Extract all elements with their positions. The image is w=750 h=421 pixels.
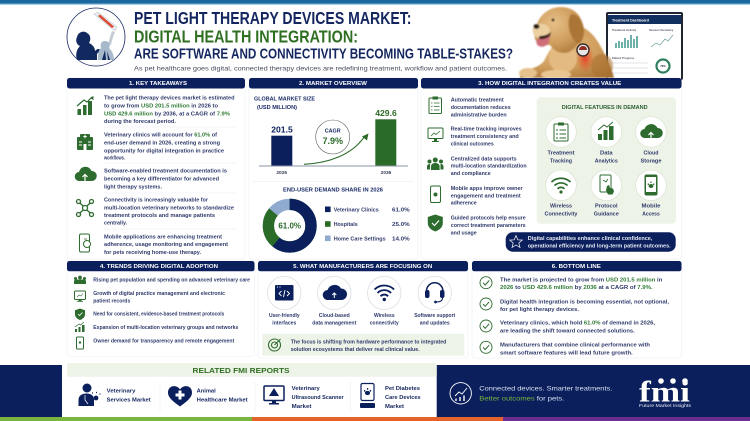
icon: mobile paw — [430, 186, 440, 202]
feature: mobile access: Access — [642, 211, 660, 217]
takeaway text 3: becoming a key differentiator for advanced — [104, 177, 220, 183]
value text 3 — [451, 156, 527, 177]
takeaway text 3: light therapy systems. — [104, 184, 162, 190]
value text 3: Centralized data supports — [451, 156, 517, 162]
heading — [249, 78, 418, 88]
value text 4: adherence — [451, 201, 477, 207]
panel: 6. bottom line — [472, 261, 682, 358]
chart label: (USD MILLION) — [257, 105, 297, 111]
feature: cloud storage: Storage — [640, 158, 662, 164]
takeaway text 5: adherence, usage monitoring and engagement — [104, 242, 228, 248]
footer band — [0, 365, 750, 421]
title: ARE SOFTWARE AND CONNECTIVITY BECOMING TABLE-STAKES? — [134, 45, 513, 62]
legend: 61.0% — [392, 207, 410, 213]
focus: user-friendly interfaces: interfaces — [272, 320, 296, 326]
tablet dashboard: 78% — [660, 64, 666, 68]
callout: focus shift: solution ecosystems that deliver real clinical value. — [291, 347, 420, 353]
icon: mobile app — [80, 234, 90, 252]
bottom line 1: 2026 to USD 429.6 million by 2036 at a CAGR of 7.9%. — [500, 285, 653, 291]
trend 3: Need for consistent, evidence-based treatment protocols — [93, 312, 224, 318]
feature: treatment tracking: Tracking — [550, 158, 573, 164]
tablet dashboard — [606, 12, 683, 80]
value text 4 — [451, 186, 523, 207]
feature: protocol guidance: Guidance — [594, 211, 619, 217]
focus: cloud-based data management — [312, 276, 356, 326]
value text 2: treatment consistency and — [451, 134, 519, 140]
takeaway text 5: for pets receiving home-use therapy. — [104, 250, 201, 256]
icon: network — [76, 200, 94, 216]
takeaway text 4: Connectivity is increasingly valuable for — [104, 198, 209, 204]
takeaway text 4: multi-location veterinary networks to standardize — [104, 205, 234, 211]
icon: veterinary clinic — [77, 134, 93, 150]
focus: wireless connectivity: Wireless — [374, 313, 395, 319]
report: veterinary ultrasound scanner: Market — [292, 404, 312, 410]
bar chart: 201.5 — [271, 124, 293, 134]
legend: 25.0% — [392, 222, 410, 228]
feature: data analytics: Data — [600, 151, 613, 157]
callout: CAGR: CAGR — [325, 128, 341, 134]
chart label — [254, 97, 315, 111]
tablet dashboard: Treatment Dashboard — [612, 18, 649, 22]
value text 1: Automatic treatment — [451, 98, 504, 104]
value text 5 — [451, 216, 526, 236]
takeaway text 2: Veterinary clinics will account for 61.0% of — [104, 132, 217, 138]
tagline: Connected devices. Smarter treatments. — [479, 387, 613, 393]
focus: software support: Software support — [414, 313, 455, 319]
takeaway text 1: The pet light therapy devices market is estimated — [104, 96, 235, 102]
focus: user-friendly interfaces: User-friendly — [269, 313, 300, 319]
bottom line 2: for pet light therapy devices. — [500, 307, 579, 313]
takeaway text 2: opportunity for digital integration in practice — [104, 148, 224, 154]
legend — [325, 206, 410, 242]
heading: DIGITAL FEATURES IN DEMAND — [562, 105, 648, 111]
trend 2: Growth of digital practice management and electronic — [93, 291, 225, 297]
heading: 2. MARKET OVERVIEW — [299, 81, 368, 87]
report: animal healthcare: Animal — [197, 389, 216, 395]
takeaway text 1: during the forecast period. — [104, 119, 176, 125]
panel: 3. how digital integration creates value — [421, 78, 682, 259]
value text 3: multi-location standardization — [451, 164, 527, 170]
report: pet diabetes care devices — [360, 384, 421, 410]
callout: digital capabilities — [506, 232, 676, 252]
panel: 5. what manufacturers are focusing on — [258, 261, 468, 358]
icon: clipboard — [429, 96, 442, 114]
feature: data analytics — [591, 117, 622, 164]
panel: 2. market overview — [249, 78, 418, 259]
trend 4: Expansion of multi-location veterinary groups and networks — [93, 325, 238, 331]
bottom line 3: are leading the shift toward connected solutions. — [500, 329, 635, 335]
heading — [67, 78, 245, 88]
feature: protocol guidance: Protocol — [595, 204, 618, 210]
focus: software support: and updates — [420, 320, 450, 326]
feature: cloud storage: Cloud — [644, 151, 659, 157]
FMI logo: fmi — [639, 376, 690, 408]
heading: 5. WHAT MANUFACTURERS ARE FOCUSING ON — [293, 264, 432, 270]
heading — [67, 261, 254, 271]
subtitle: As pet healthcare goes digital, connected therapy devices are redefining treatment, workflow and patient outcomes. — [134, 66, 507, 72]
chart label: GLOBAL MARKET SIZE — [254, 97, 315, 103]
report: veterinary services: Services Market — [107, 398, 151, 404]
takeaway text 1: to grow from USD 201.5 million in 2026 to — [104, 104, 219, 110]
heading: 4. TRENDS DRIVING DIGITAL ADOPTION — [100, 264, 218, 270]
icon: cloud upload — [75, 167, 97, 181]
donut chart: 61.0% — [278, 221, 301, 230]
takeaway text 4: centrally. — [104, 221, 127, 227]
icon: growth circle — [450, 383, 471, 404]
report: veterinary ultrasound scanner: Ultrasound Scanner — [292, 395, 345, 401]
callout: focus shift — [262, 334, 464, 356]
icon: monitor — [428, 128, 443, 142]
feature: wireless connectivity: Wireless — [550, 204, 572, 210]
value text 5: and usage — [451, 230, 477, 236]
bar chart: 2026 — [276, 170, 287, 176]
legend: Home Care Settings — [334, 236, 386, 242]
trend 4 — [75, 322, 238, 332]
tagline: Better outcomes for pets. — [479, 397, 565, 403]
bottom line 2 — [480, 298, 669, 313]
trend 2 — [74, 291, 225, 304]
trend 3 — [75, 308, 224, 320]
callout: CAGR — [316, 120, 350, 154]
report: animal healthcare — [168, 386, 248, 406]
report: veterinary ultrasound scanner: Veterinary — [292, 386, 320, 392]
report: veterinary services — [78, 384, 151, 406]
focus: software support — [414, 276, 455, 326]
heading — [258, 261, 468, 271]
value text 1 — [451, 98, 511, 118]
feature: mobile access — [636, 170, 666, 217]
panel: 4. trends driving digital adoption — [67, 261, 254, 356]
arrow — [304, 134, 368, 164]
bottom line 2: Digital health integration is becoming essential, not optional, — [500, 299, 669, 305]
callout: digital capabilities: Digital capabilities enhance clinical confidence, — [528, 236, 653, 242]
heading: 6. BOTTOM LINE — [552, 264, 601, 270]
tablet dashboard: Patient Progress — [612, 56, 635, 60]
icon: team — [427, 158, 444, 170]
feature: treatment tracking — [546, 117, 576, 164]
report: pet diabetes care devices: Pet Diabetes — [385, 386, 420, 392]
bar chart: 429.6 — [375, 108, 397, 118]
feature: wireless connectivity: Connectivity — [544, 211, 578, 217]
title: PET LIGHT THERAPY DEVICES MARKET: — [134, 8, 412, 28]
focus: cloud-based data management: data management — [312, 320, 356, 326]
report: pet diabetes care devices: Care Devices — [385, 395, 421, 401]
callout: focus shift: The focus is shifting from hardware performance to integrated — [291, 339, 447, 345]
feature: protocol guidance — [591, 170, 622, 217]
heading — [472, 261, 682, 271]
donut chart — [268, 204, 311, 247]
title — [134, 8, 513, 62]
value text 4: Mobile apps improve owner — [451, 186, 523, 192]
feature: treatment tracking: Treatment — [548, 151, 575, 157]
feature: cloud storage — [636, 117, 666, 164]
bar chart: 2036 — [381, 170, 392, 176]
takeaway text 4 — [104, 198, 234, 227]
callout: digital capabilities: operational efficiency and long-term patient outcomes. — [528, 243, 671, 249]
panel: 1. key takeaways — [67, 78, 245, 259]
report: veterinary services: Veterinary — [107, 389, 135, 395]
takeaway text 2 — [103, 132, 224, 162]
logo: pet and therapy lamp — [67, 8, 125, 66]
takeaway text 3: Software-enabled treatment documentation is — [104, 169, 227, 175]
icon: shield — [428, 214, 443, 232]
report: pet diabetes care devices: Market — [385, 404, 404, 410]
bar chart — [259, 108, 408, 176]
bottom line 4 — [480, 341, 651, 357]
focus: cloud-based data management: Cloud-based — [319, 313, 350, 319]
takeaway text 3 — [104, 169, 227, 190]
takeaway text 2: workflows. — [103, 156, 125, 162]
report: animal healthcare: Healthcare Market — [197, 398, 248, 404]
bottom line 3: Veterinary clinics, which hold 61.0% of demand in 2026, — [500, 321, 655, 327]
value text 2: Real-time tracking improves — [451, 127, 522, 133]
bottom line 3 — [480, 320, 655, 335]
takeaway text 4: treatment protocols and manage patients — [104, 213, 215, 219]
value text 3: and compliance — [451, 171, 491, 177]
focus: user-friendly interfaces — [268, 276, 301, 326]
icon: growth chart — [77, 96, 94, 115]
takeaway text 5 — [104, 234, 228, 256]
value text 5: Guided protocols help ensure — [451, 216, 526, 222]
focus: wireless connectivity — [368, 276, 401, 326]
callout: CAGR: 7.9% — [322, 136, 343, 146]
tablet dashboard: Session Summary — [649, 28, 674, 32]
value text 2 — [451, 127, 522, 147]
heading — [67, 363, 437, 377]
tagline — [479, 387, 613, 403]
legend: Veterinary Clinics — [334, 207, 379, 213]
panel: related FMI reports — [62, 363, 437, 417]
value text 2: clinical outcomes — [451, 141, 494, 147]
trend 5 — [76, 337, 234, 349]
panel: digital features in demand — [537, 97, 676, 224]
feature: wireless connectivity — [544, 170, 578, 217]
top bar — [0, 0, 750, 5]
heading: 1. KEY TAKEAWAYS — [129, 81, 187, 87]
heading — [421, 78, 682, 88]
bottom line 1: The market is projected to grow from USD 201.5 million in — [500, 277, 663, 283]
feature: data analytics: Analytics — [595, 158, 618, 164]
bottom line 4: Manufacturers that combine clinical performance with — [500, 343, 651, 349]
trend 1 — [74, 276, 250, 284]
takeaway text 1: USD 429.6 million by 2036, at a CAGR of 7.9% — [104, 112, 230, 118]
FMI logo: Future Market Insights — [639, 403, 692, 409]
value text 4: engagement and treatment — [451, 193, 521, 199]
heading: RELATED FMI REPORTS — [192, 366, 290, 375]
trend 1: Rising pet population and spending on advanced veterinary care — [93, 278, 250, 284]
trend 2: patient records — [93, 298, 130, 304]
report: veterinary ultrasound scanner — [264, 386, 345, 410]
focus: wireless connectivity: connectivity — [370, 320, 400, 326]
takeaway text 1 — [104, 96, 235, 125]
takeaway text 5: Mobile applications are enhancing treatment — [104, 234, 222, 240]
heading: 3. HOW DIGITAL INTEGRATION CREATES VALUE — [478, 81, 621, 87]
takeaway text 2: end-user demand in 2026, creating a strong — [104, 140, 221, 146]
bottom line 4: smart software features will lead future growth. — [500, 351, 633, 357]
legend: Hospitals — [334, 222, 358, 228]
bottom line 1 — [480, 277, 663, 291]
value text 1: administrative burden — [451, 112, 507, 118]
value text 1: documentation reduces — [451, 105, 511, 111]
golden retriever with therapy device — [519, 7, 614, 79]
feature: mobile access: Mobile — [642, 204, 660, 210]
value text 5: correct treatment parameters — [451, 223, 526, 229]
tablet dashboard: Treatment Activity — [612, 28, 637, 32]
legend: 14.0% — [392, 236, 410, 242]
trend 5: Owner demand for transparency and remote engagement — [93, 339, 234, 345]
title: DIGITAL HEALTH INTEGRATION: — [134, 27, 358, 47]
donut heading: END-USER DEMAND SHARE IN 2026 — [283, 188, 383, 194]
